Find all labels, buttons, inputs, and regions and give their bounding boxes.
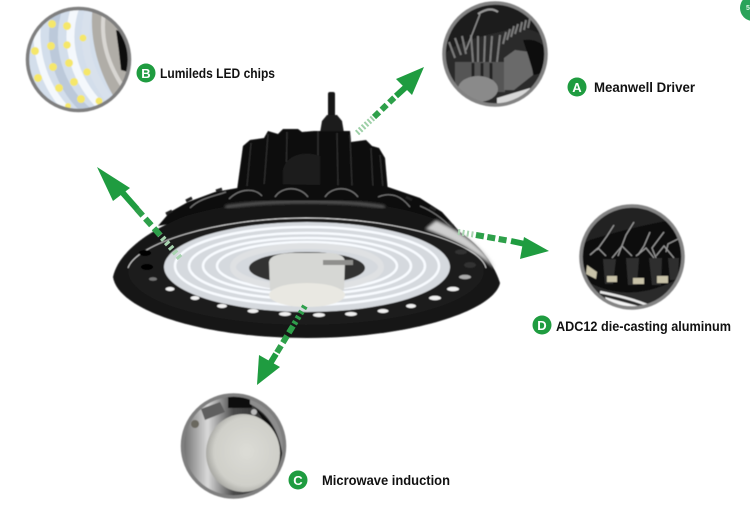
- callout D: ADC12 die-casting aluminum photo: [580, 206, 690, 312]
- arrow: to Meanwell Driver: [357, 67, 424, 133]
- lamp vent holes: [139, 250, 476, 317]
- arrow: to Microwave induction: [257, 306, 305, 385]
- yellow LED chips: [31, 20, 102, 109]
- tan lit patches: [586, 265, 668, 284]
- lamp LED ring stripes: [175, 227, 439, 305]
- badge D: D: [537, 318, 547, 333]
- label C: Microwave induction: [288, 470, 450, 490]
- lamp heatsink housing: [237, 129, 388, 192]
- LED strip bands: [33, 10, 98, 109]
- arrow: to Lumileds LED chips: [97, 167, 180, 258]
- badge: top-right corner tag: [740, 0, 750, 21]
- product: UFO high bay lamp: [113, 92, 500, 338]
- label C: Microwave induction: Microwave induction: [322, 473, 450, 488]
- arrow: to ADC12 die-casting aluminum: [458, 232, 549, 259]
- lamp center opening: [249, 252, 365, 284]
- label A: Meanwell Driver: Meanwell Driver: [594, 80, 696, 95]
- badge B: B: [141, 66, 151, 81]
- lower rim: [592, 280, 674, 306]
- driver fins: [449, 18, 530, 64]
- lamp cable: [328, 92, 335, 124]
- sensor dome: [206, 414, 280, 492]
- callout A: Meanwell Driver photo: [443, 2, 547, 106]
- lamp upper rim sheen: [225, 202, 385, 207]
- label A: Meanwell Driver: [568, 78, 696, 96]
- badge C: C: [293, 473, 303, 488]
- label D: ADC12 die-casting aluminum: ADC12 die-casting aluminum: [556, 319, 731, 334]
- badge D: [532, 316, 552, 334]
- driver mounting block: [504, 50, 533, 90]
- lamp microwave sensor: [269, 253, 353, 307]
- callout B: Lumileds LED chips photo: [27, 5, 135, 115]
- lamp cable gland: [320, 115, 344, 133]
- lamp LED lens: [164, 222, 450, 312]
- lamp right rim highlight: [425, 220, 495, 269]
- label B: Lumileds LED chips: Lumileds LED chips: [160, 66, 275, 81]
- badge A: A: [572, 80, 582, 95]
- callout C: Microwave induction photo: [182, 394, 290, 498]
- lamp radial cooling fins: [158, 184, 460, 232]
- label B: Lumileds LED chips: [136, 64, 275, 82]
- housing reflector: [92, 12, 127, 96]
- die-cast ribs: [590, 222, 680, 258]
- label D: ADC12 die-casting aluminum: [532, 316, 731, 334]
- lamp inner ring: [128, 217, 484, 325]
- heat sink feet: [603, 258, 679, 285]
- badge: top-right corner tag: 5: [746, 5, 750, 12]
- badge C: [288, 470, 308, 490]
- driver cylinder: [458, 76, 498, 102]
- lamp outer reflector body: [113, 200, 500, 338]
